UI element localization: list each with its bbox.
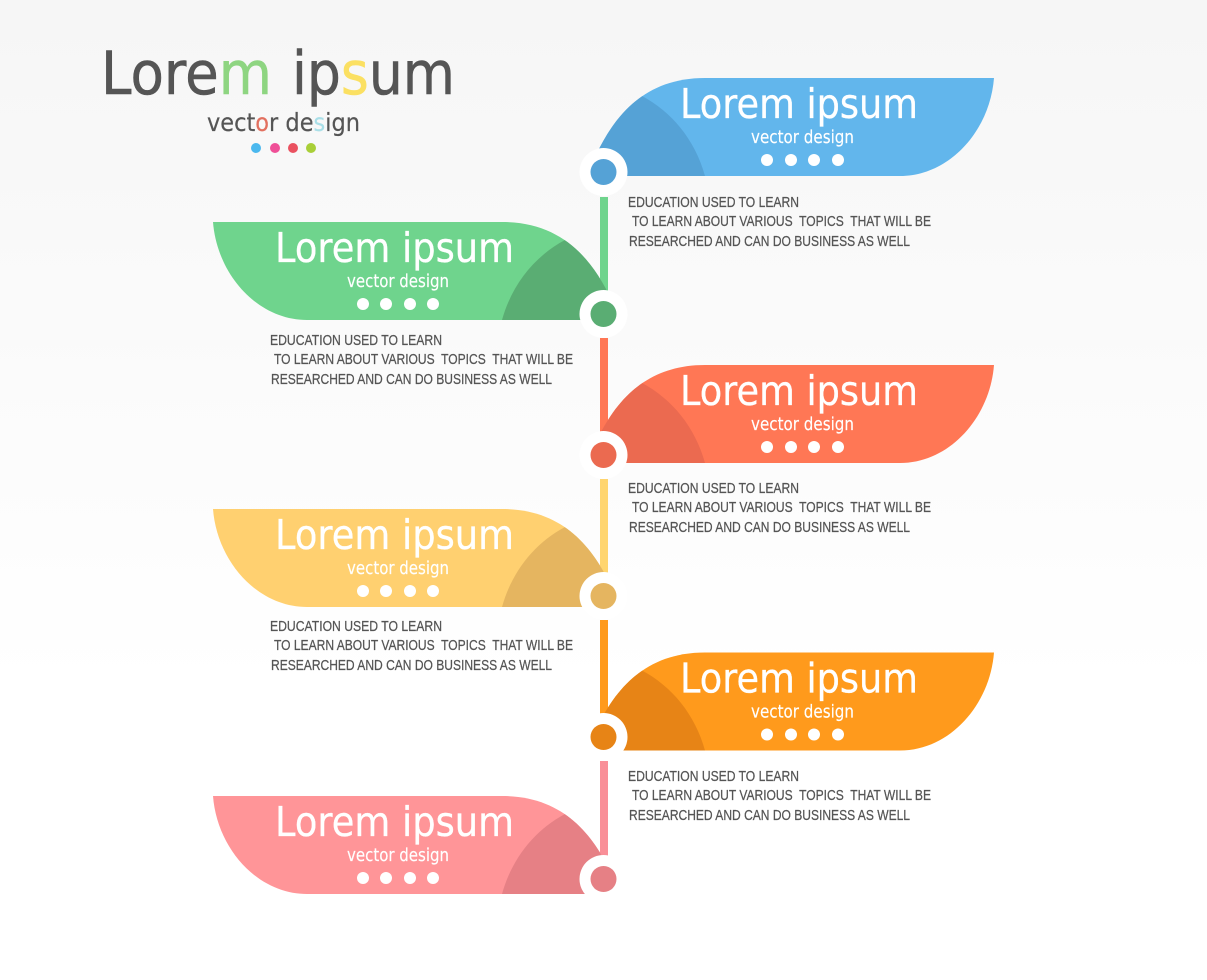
text block: green: EDUCATION USED TO LEARN [270, 333, 442, 349]
connector: yellow segment [600, 479, 608, 581]
banner heading: Lorem ipsum [680, 367, 918, 415]
banner subheading: vector design [347, 271, 449, 292]
main title [101, 39, 455, 153]
text block: blue [628, 195, 931, 250]
node: pink [580, 855, 628, 903]
panel: green banner [213, 222, 617, 320]
banner shade [590, 96, 705, 176]
text block: red [628, 481, 931, 536]
banner dots [761, 154, 844, 166]
banner heading: Lorem ipsum [275, 798, 514, 846]
panel: orange banner [590, 652, 994, 750]
banner subheading: vector design [751, 702, 854, 722]
banner shape [213, 222, 611, 320]
banner dots [357, 298, 439, 310]
banner heading: Lorem ipsum [275, 224, 514, 272]
connector: orange segment [600, 620, 608, 722]
banner shade [590, 383, 705, 463]
subheading: vector design: vector design [207, 108, 360, 137]
title dots [251, 143, 316, 153]
banner subheading: vector design [751, 127, 854, 148]
heading: Lorem ipsum [101, 39, 455, 109]
connector: green segment [600, 197, 608, 297]
banner shape [213, 796, 611, 894]
node: green [580, 290, 628, 338]
connector: pink segment [600, 761, 608, 861]
banner shape [213, 509, 611, 607]
text block: orange [628, 769, 931, 824]
banner subheading: vector design [347, 845, 449, 866]
node: orange [580, 713, 628, 761]
node: red [580, 431, 628, 479]
banner dots [761, 441, 844, 453]
text block: green [270, 333, 573, 388]
banner shape [596, 78, 994, 176]
text block: orange: RESEARCHED AND CAN DO BUSINESS AS WELL [629, 808, 910, 824]
text block: blue: EDUCATION USED TO LEARN [628, 195, 799, 211]
banner dots [761, 728, 844, 740]
panel: red banner [590, 365, 994, 463]
heading: Lorem ipsum: ipsum [292, 39, 455, 109]
banner subheading: vector design [751, 414, 854, 435]
text block: red: EDUCATION USED TO LEARN [628, 481, 799, 497]
heading: Lorem ipsum: Lorem [101, 39, 272, 109]
text block: yellow: EDUCATION USED TO LEARN [270, 619, 442, 635]
text block: orange: TO LEARN ABOUT VARIOUS TOPICS THAT WILL BE [632, 788, 931, 804]
banner dots [357, 585, 439, 597]
text block: yellow: TO LEARN ABOUT VARIOUS TOPICS THAT WILL BE [274, 638, 573, 654]
text block: red: TO LEARN ABOUT VARIOUS TOPICS THAT WILL BE [632, 500, 931, 516]
banner heading: Lorem ipsum [275, 511, 514, 559]
text block: orange: EDUCATION USED TO LEARN [628, 769, 799, 785]
text block: blue: TO LEARN ABOUT VARIOUS TOPICS THAT WILL BE [632, 214, 931, 230]
banner heading: Lorem ipsum [680, 80, 918, 128]
banner shape [596, 365, 994, 463]
node: yellow [580, 572, 628, 620]
banner shade [604, 670, 705, 750]
text block: green: TO LEARN ABOUT VARIOUS TOPICS THAT WILL BE [274, 352, 573, 368]
banner shape [596, 652, 994, 750]
banner subheading: vector design [347, 558, 449, 579]
panel: blue banner [590, 78, 994, 176]
text block: yellow [270, 619, 573, 674]
panel: yellow banner [213, 509, 617, 607]
text block: blue: RESEARCHED AND CAN DO BUSINESS AS WELL [629, 234, 910, 250]
text block: yellow: RESEARCHED AND CAN DO BUSINESS AS WELL [271, 658, 552, 674]
banner heading: Lorem ipsum [680, 654, 918, 702]
text block: green: RESEARCHED AND CAN DO BUSINESS AS WELL [271, 372, 552, 388]
panel: pink banner [213, 796, 617, 894]
text block: red: RESEARCHED AND CAN DO BUSINESS AS WELL [629, 520, 910, 536]
banner shade [502, 814, 602, 894]
connector: red segment [600, 338, 608, 442]
node: blue [580, 148, 628, 196]
banner shade [502, 240, 617, 320]
banner dots [357, 872, 439, 884]
banner shade [502, 527, 604, 607]
